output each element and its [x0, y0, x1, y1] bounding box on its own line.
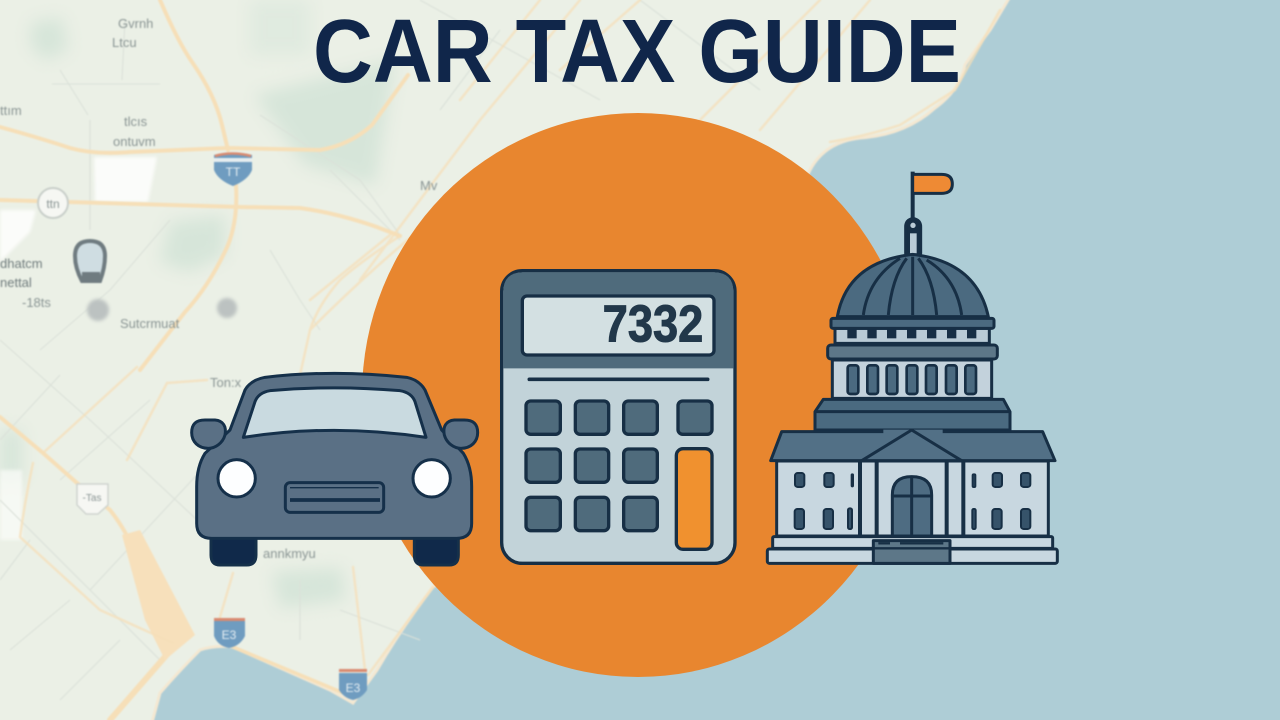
land mass: [0, 0, 1014, 720]
roof: [771, 430, 1055, 461]
orange key: [676, 449, 712, 549]
door: [892, 477, 932, 536]
shield: left coast: [214, 618, 245, 648]
map labels: nettal: [0, 275, 32, 290]
flag: [913, 172, 952, 220]
icon: car: [192, 373, 478, 565]
grille: [285, 483, 384, 512]
secondary roads: [20, 0, 1000, 675]
icon: calculator: [502, 271, 735, 563]
main roads: [0, 0, 408, 720]
shield: left coast: E3: [222, 628, 237, 642]
shield: top road: [214, 152, 252, 186]
green areas: [0, 0, 395, 608]
wheels: [211, 535, 458, 565]
map labels: Ltcu: [112, 35, 137, 50]
title: CAR TAX GUIDE: [313, 2, 961, 102]
map labels: dhatcm: [0, 256, 43, 271]
side mirrors: [192, 420, 478, 448]
shield: right coast: E3: [346, 681, 361, 695]
divider: [529, 374, 708, 385]
display number: 7332: [603, 295, 703, 353]
grey landmarks: [87, 298, 237, 321]
white patches: [0, 157, 157, 540]
calculator header: [503, 272, 733, 368]
keypad: [526, 401, 712, 531]
highway interchange bundle: [122, 530, 195, 660]
map labels: Sutcrmuat: [120, 316, 180, 331]
dome: [837, 254, 988, 317]
windshield: [243, 388, 426, 437]
calculator body: [502, 271, 735, 563]
crenellated drum: [828, 318, 997, 359]
map pin: [75, 241, 105, 283]
map labels: -18ts: [22, 295, 51, 310]
map labels: ttım: [0, 103, 22, 118]
map labels: ontuvm: [113, 134, 156, 149]
highway shields: [38, 152, 367, 700]
map labels: annkmyu: [263, 546, 316, 561]
windows: [795, 473, 1030, 529]
map labels: Gvrnh: [118, 16, 153, 31]
white route marker 1: ttn: [46, 197, 60, 211]
shield: right coast: [339, 669, 367, 700]
display: [522, 296, 714, 355]
white route marker 2: -Tas: [83, 493, 101, 504]
minor streets: [0, 0, 760, 700]
orange circle: [362, 113, 914, 677]
white route marker 1: [38, 188, 68, 218]
lantern: [906, 218, 921, 253]
steps: [767, 537, 1057, 563]
car body: [197, 373, 472, 538]
icon: capitol building: [767, 172, 1057, 563]
headlights: [218, 460, 450, 497]
map labels: tlcıs: [124, 114, 148, 129]
map labels: Mv: [420, 178, 438, 193]
map labels: Ton:x: [210, 375, 242, 390]
colonnade: [832, 360, 992, 398]
white route marker 2: [77, 484, 108, 514]
map labels: [0, 16, 438, 561]
upper base: [815, 399, 1010, 430]
shield: top road: TT: [226, 165, 241, 179]
walls: [777, 461, 1048, 536]
